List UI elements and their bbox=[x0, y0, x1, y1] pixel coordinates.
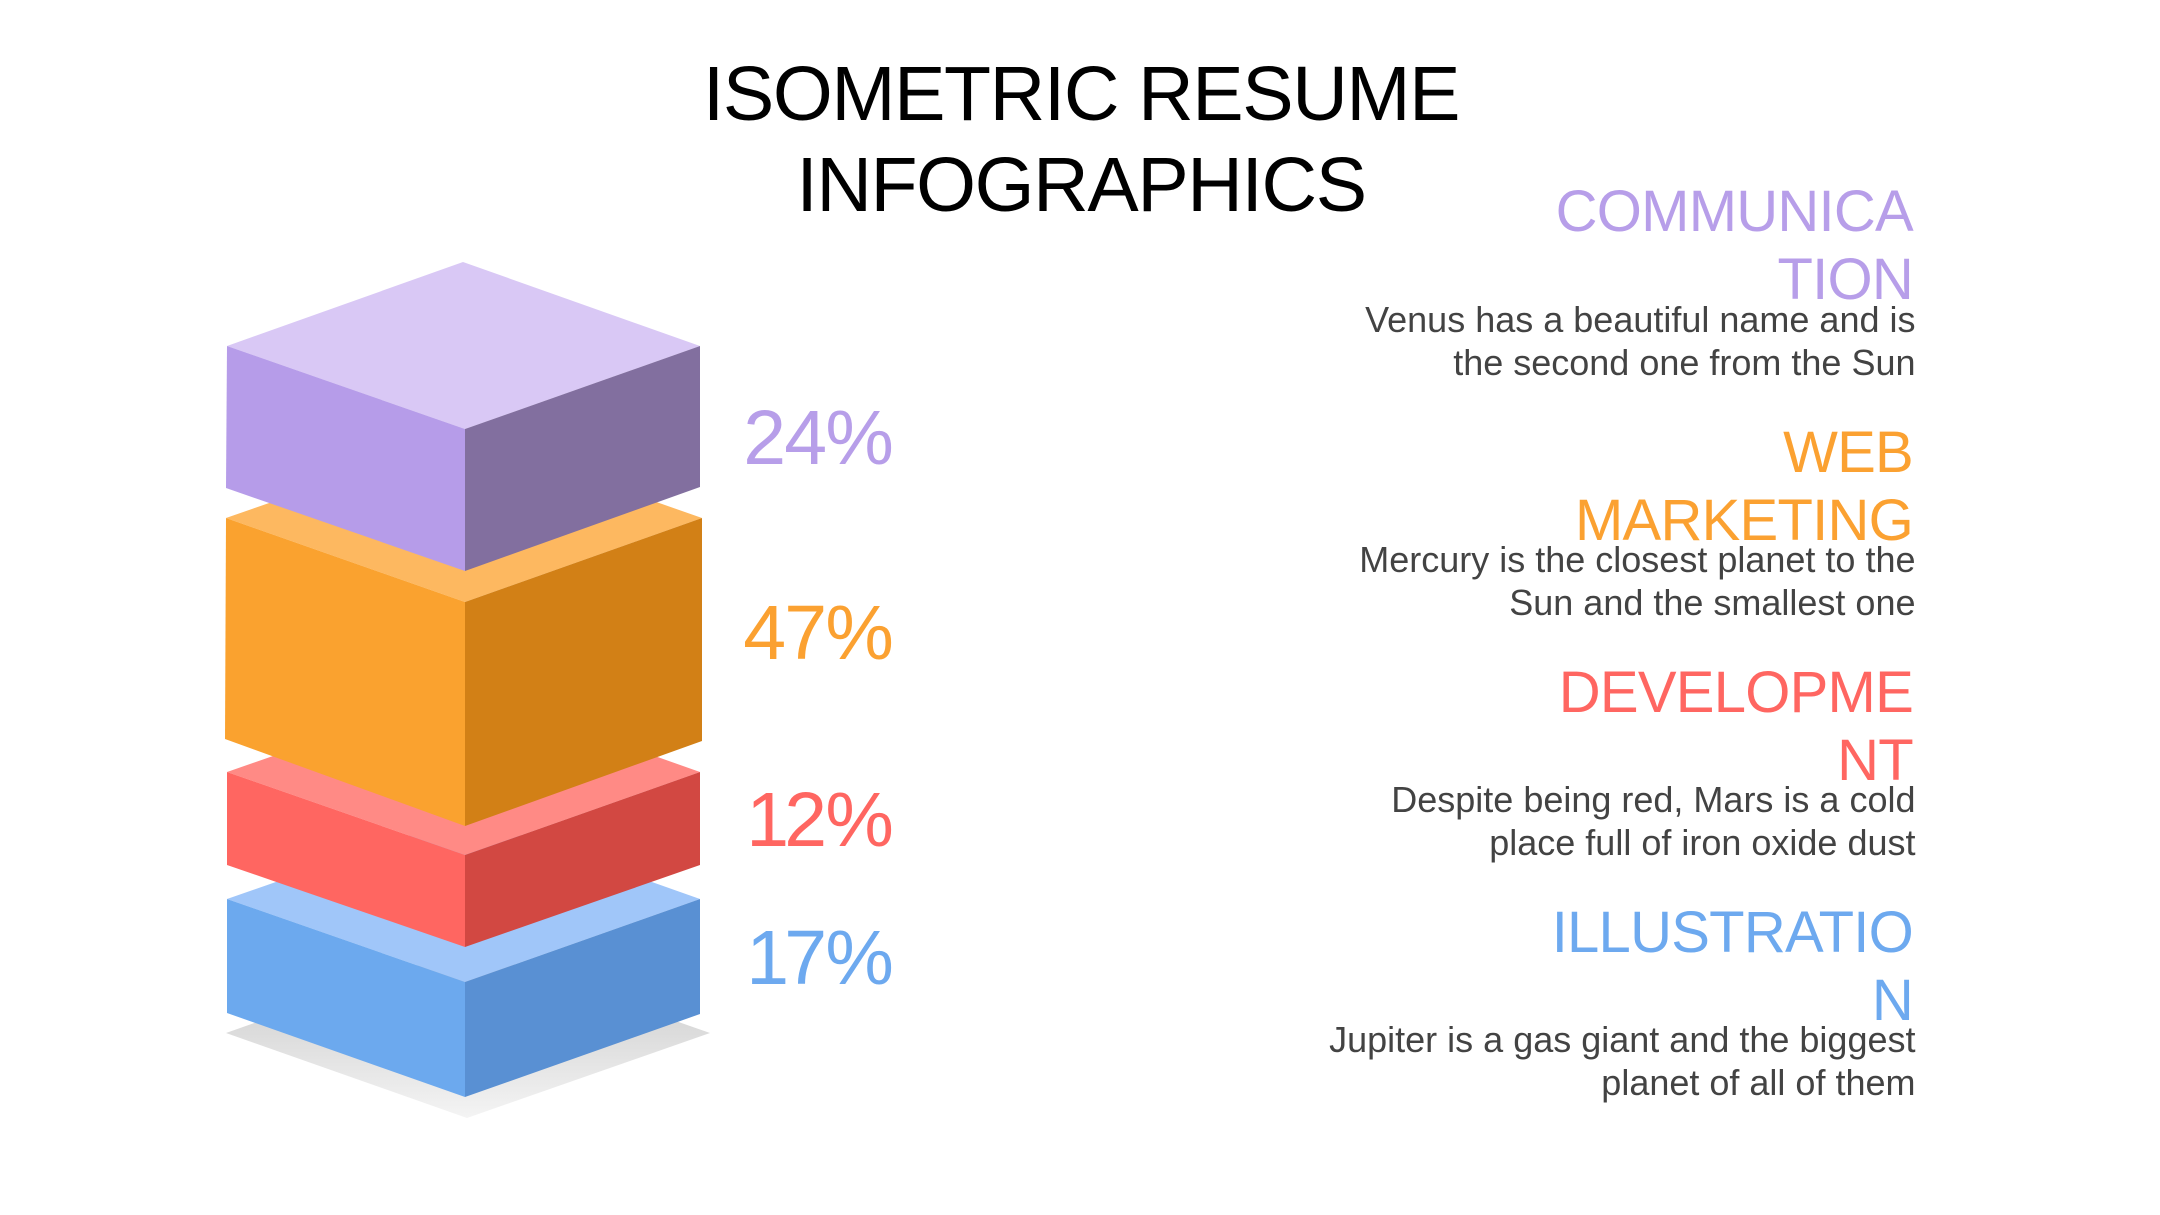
text block: communication: Venus has a beautiful name and is bbox=[1365, 299, 1916, 340]
isometric layer stack chart bbox=[225, 262, 710, 1118]
text block: development bbox=[1391, 660, 1916, 863]
percentage: web marketing 47%: 47% bbox=[743, 590, 892, 676]
text block: web marketing: WEB bbox=[1783, 420, 1913, 485]
text block: illustration: N bbox=[1872, 968, 1913, 1033]
layer: illustration (blue) bbox=[227, 816, 700, 1097]
percentage: development 12%: 12% bbox=[746, 777, 892, 863]
text block: development: place full of iron oxide dust bbox=[1489, 822, 1916, 863]
text block: development: NT bbox=[1837, 728, 1913, 793]
text block: development: Despite being red, Mars is a cold bbox=[1391, 779, 1916, 820]
title: ISOMETRIC RESUME bbox=[703, 51, 1459, 137]
ground shadow bbox=[226, 948, 710, 1118]
text block: communication: the second one from the Sun bbox=[1453, 342, 1916, 383]
title: INFOGRAPHICS bbox=[796, 142, 1366, 228]
text block: web marketing: Sun and the smallest one bbox=[1509, 582, 1916, 623]
text block: illustration: planet of all of them bbox=[1601, 1062, 1916, 1103]
layer: development (red) bbox=[227, 689, 700, 947]
text block: communication: COMMUNICA bbox=[1556, 179, 1914, 244]
text block: communication bbox=[1365, 179, 1916, 383]
text block: illustration: Jupiter is a gas giant and the biggest bbox=[1329, 1019, 1916, 1060]
text block: web marketing: MARKETING bbox=[1575, 488, 1913, 553]
layer: communication (purple) bbox=[226, 262, 700, 571]
title bbox=[703, 51, 1459, 228]
text block: web marketing bbox=[1359, 420, 1916, 623]
text block: web marketing: Mercury is the closest planet to the bbox=[1359, 539, 1916, 580]
text block: illustration bbox=[1329, 900, 1916, 1103]
percentage: communication 24%: 24% bbox=[743, 395, 892, 481]
layer: web marketing (orange) bbox=[225, 435, 702, 826]
text block: communication: TION bbox=[1777, 247, 1913, 312]
text block: illustration: ILLUSTRATIO bbox=[1552, 900, 1913, 965]
percentage: illustration 17%: 17% bbox=[746, 915, 892, 1001]
text block: development: DEVELOPME bbox=[1559, 660, 1913, 725]
